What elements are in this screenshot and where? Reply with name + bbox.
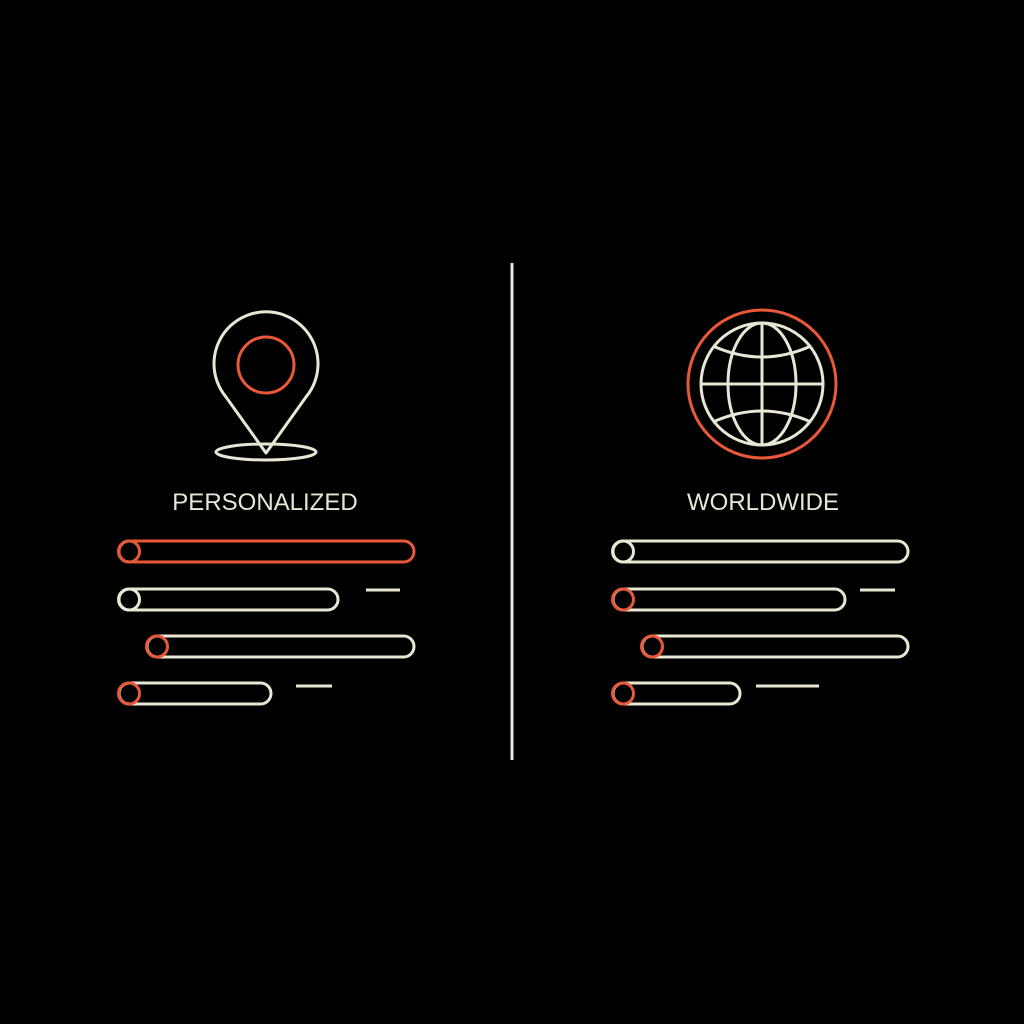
icon: globe (688, 310, 836, 458)
divider (510, 263, 514, 760)
heading: personalized: PERSONALIZED (172, 489, 358, 516)
panel: worldwide bars (612, 541, 908, 704)
heading: worldwide: WORLDWIDE (687, 489, 839, 516)
icon: location pin (214, 312, 318, 460)
panel: personalized bars (118, 541, 414, 704)
